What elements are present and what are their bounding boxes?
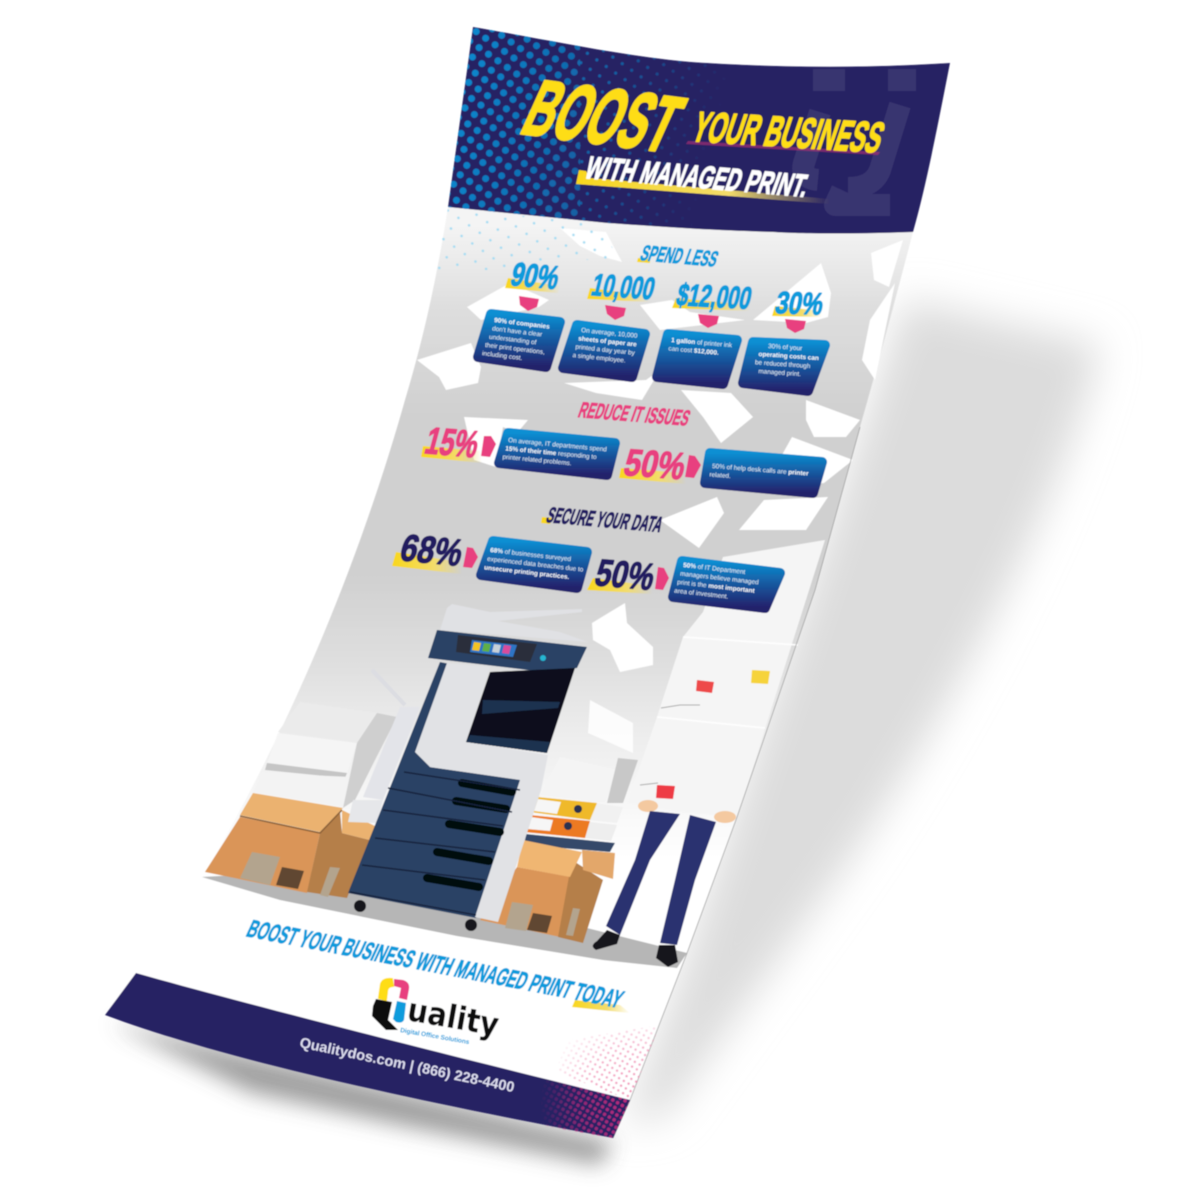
finisher bbox=[372, 670, 405, 705]
paper stacks behind printer bbox=[253, 702, 638, 808]
card: 50% help desk bbox=[705, 453, 822, 493]
footer band bbox=[105, 973, 630, 1138]
note held bbox=[656, 785, 675, 799]
sticky notes bbox=[696, 680, 714, 693]
poster sheet bbox=[105, 10, 950, 1138]
stat: 50% pink: 50% bbox=[620, 442, 690, 488]
card: 68%: 68% of businesses surveyed bbox=[490, 547, 571, 563]
card: 68% bbox=[481, 541, 587, 588]
card: $12,000: can cost $12,000. bbox=[668, 345, 719, 357]
card: 15%: printer related problems. bbox=[502, 454, 572, 467]
closing line bbox=[242, 916, 630, 1013]
wheels bbox=[354, 900, 366, 912]
logo mark bbox=[372, 979, 409, 1030]
top left pale halftone bbox=[436, 208, 620, 270]
card: 15% bbox=[499, 433, 615, 475]
logo tagline: Digital Office Solutions bbox=[400, 1027, 470, 1046]
card: 50% managers: print is the most important bbox=[677, 579, 755, 595]
card: 90% bbox=[478, 314, 560, 367]
card: 30%: operating costs can bbox=[758, 351, 819, 362]
logo: Quality bbox=[372, 979, 502, 1046]
card: 90%: understanding of bbox=[489, 334, 537, 347]
illustration: cardboard box right bbox=[480, 840, 615, 943]
stat: 10,000: 10,000 bbox=[588, 268, 659, 306]
card: 10,000 bbox=[563, 325, 645, 377]
footer contact: Qualitydos.com | (866) 228-4400 bbox=[298, 1035, 516, 1096]
sheet background bbox=[105, 27, 950, 1138]
section: spend less bbox=[478, 241, 827, 391]
card: 30%: 30% of your bbox=[768, 343, 803, 352]
card: 90%: don't have a clear bbox=[492, 325, 543, 339]
title: YOUR BUSINESS bbox=[686, 103, 890, 162]
header halftone bbox=[448, 28, 916, 226]
illustration: binders bbox=[524, 797, 623, 852]
shoes bbox=[593, 930, 620, 950]
footer magenta halftone bbox=[544, 1080, 630, 1138]
ghost logo mark bbox=[803, 80, 916, 205]
card: 30%: managed print. bbox=[758, 368, 801, 378]
title: BOOST: BOOST bbox=[510, 65, 696, 169]
card: 90%: their print operations, bbox=[485, 342, 545, 356]
light L panel bbox=[415, 663, 548, 922]
stat: 30% bbox=[772, 285, 827, 333]
flying paper sheets bbox=[417, 228, 903, 753]
heading: reduce IT issues: REDUCE IT ISSUES bbox=[575, 398, 693, 430]
navy body bbox=[348, 662, 522, 918]
title: YOUR BUSINESS: YOUR BUSINESS bbox=[687, 103, 890, 162]
hands bbox=[638, 800, 658, 812]
card: 90%: including cost. bbox=[482, 350, 523, 362]
heading: secure your data bbox=[541, 503, 667, 537]
card: 10,000: a single employee. bbox=[572, 352, 626, 365]
title: with managed print bbox=[576, 150, 830, 204]
scanner lid bbox=[440, 604, 588, 642]
card: 68%: unsecure printing practices. bbox=[484, 564, 570, 581]
card: 15%: On average, IT departments spend bbox=[508, 437, 607, 454]
stat: 50% navy: 50% bbox=[591, 552, 660, 599]
illustration: multifunction printer bbox=[348, 604, 588, 931]
card: $12,000 bbox=[657, 334, 737, 384]
stat: 15%: 15% bbox=[421, 420, 484, 466]
card: 50% managers: managers believe managed bbox=[680, 571, 759, 586]
card: 50% help desk: 50% of help desk calls are printer bbox=[712, 463, 809, 478]
header band bbox=[430, 10, 950, 234]
card: 15%: 15% of their time responding to bbox=[505, 445, 597, 461]
grey body gradient bbox=[202, 207, 913, 968]
worker's paper stack bbox=[627, 540, 825, 817]
cast shadow bbox=[110, 300, 1100, 1165]
card: 30% bbox=[743, 342, 825, 391]
legs bbox=[606, 811, 680, 935]
card: 50% help desk: related. bbox=[709, 471, 731, 480]
card: 30%: be reduced through bbox=[755, 359, 811, 370]
stat: 10,000 bbox=[587, 268, 659, 320]
illustration: cardboard box left bbox=[205, 793, 377, 898]
heading: spend less bbox=[637, 241, 722, 271]
floor bbox=[202, 870, 687, 968]
heading: secure your data: SECURE YOUR DATA bbox=[543, 503, 667, 537]
stat: 30%: 30% bbox=[773, 285, 827, 322]
card: 90%: 90% of companies bbox=[494, 317, 550, 331]
illustration: worker bbox=[593, 785, 736, 967]
control panel bbox=[428, 630, 587, 672]
stat: 90%: 90% bbox=[507, 257, 563, 297]
title: with managed print: WITH MANAGED PRINT. bbox=[581, 150, 814, 204]
right edge line bbox=[613, 427, 860, 1138]
card: 50% managers bbox=[673, 561, 780, 608]
card: 10,000: sheets of paper are bbox=[578, 335, 637, 349]
drawer seams bbox=[350, 772, 520, 915]
heading: spend less: SPEND LESS bbox=[637, 241, 722, 271]
section: reduce IT issues bbox=[421, 398, 822, 493]
card: 68%: experienced data breaches due to bbox=[487, 556, 584, 574]
pink halftone corner bbox=[559, 1027, 656, 1098]
section: secure your data bbox=[392, 503, 780, 608]
output window bbox=[466, 668, 575, 753]
logo wordmark: uality bbox=[405, 990, 502, 1044]
touch screen bbox=[456, 635, 546, 662]
card: $12,000: 1 gallon of printer ink bbox=[671, 337, 732, 349]
stat: $12,000: $12,000 bbox=[673, 278, 755, 316]
card: 10,000: printed a day year by bbox=[575, 344, 636, 357]
card: 50% managers: area of investment. bbox=[674, 588, 729, 601]
card: 50% managers: 50% of IT Department bbox=[683, 562, 746, 576]
stat: $12,000 bbox=[672, 278, 755, 328]
closing line: BOOST YOUR BUSINESS WITH MANAGED PRINT TODAY bbox=[242, 916, 628, 1013]
stat: 68%: 68% bbox=[396, 527, 468, 575]
drawer handles bbox=[427, 783, 512, 887]
card: 10,000: On average, 10,000 bbox=[581, 327, 638, 340]
stat: 90% bbox=[505, 257, 563, 311]
